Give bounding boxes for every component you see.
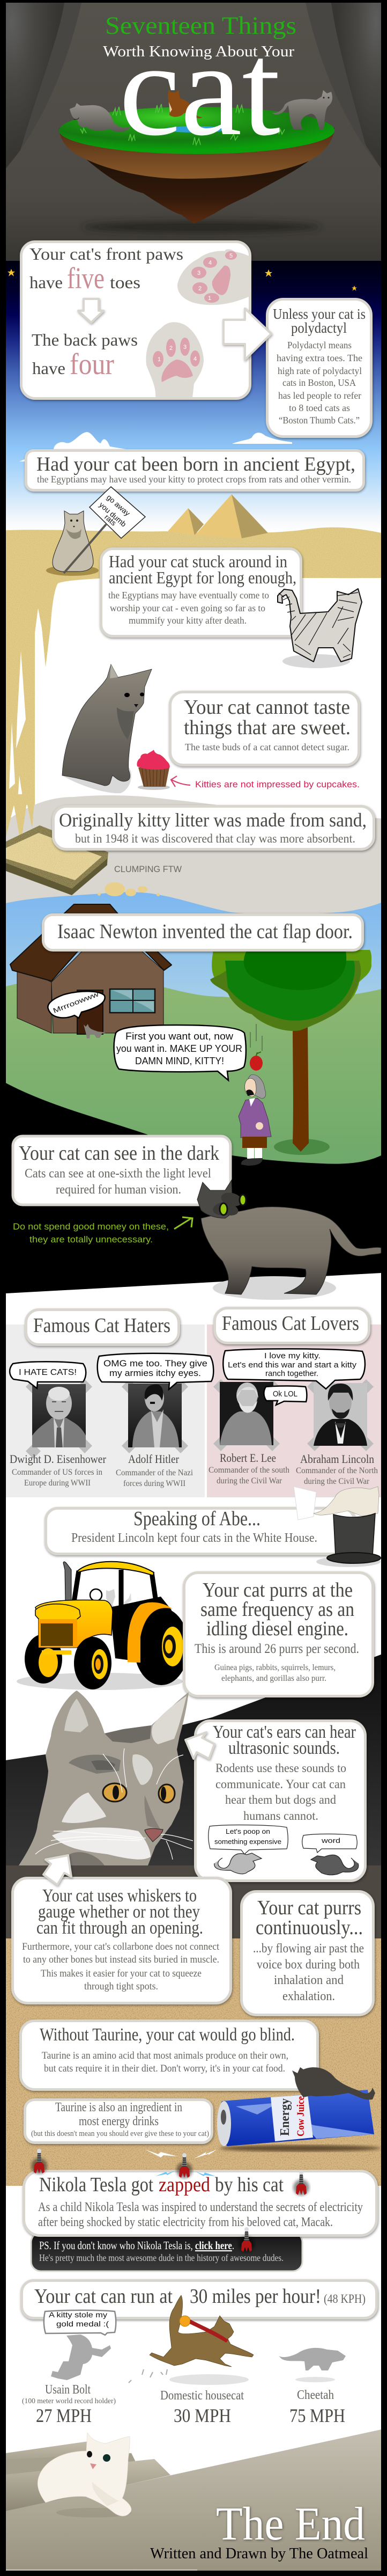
heading: ears bbox=[213, 1722, 356, 1758]
arrow: to ears bbox=[185, 1732, 214, 1759]
heading: whiskers: can fit through an opening. bbox=[36, 1918, 203, 1938]
background: cork bbox=[6, 1938, 381, 2186]
speech: let's end this war: Let's end this war and start a kitty bbox=[228, 1360, 357, 1370]
portrait: lincoln bbox=[314, 1383, 367, 1446]
heading: mummify: Had your cat stuck around in bbox=[109, 552, 287, 571]
illustration: cat with night vision goggles bbox=[197, 1180, 381, 1300]
text: purr rate: This is around 26 purrs per second. bbox=[195, 1642, 359, 1656]
illustration: cat with sign bbox=[46, 487, 145, 576]
text: ears: communicate. Your cat can bbox=[215, 1777, 346, 1791]
speech: ok lol bbox=[264, 1386, 307, 1405]
canopy bbox=[210, 950, 371, 1031]
door bbox=[77, 990, 103, 1034]
icon: front paw: 1 bbox=[208, 295, 211, 302]
sand drip tails bbox=[6, 794, 35, 844]
portrait: hitler bbox=[128, 1384, 182, 1447]
icon: front paw: 2 bbox=[198, 286, 202, 292]
far wheel bbox=[25, 1634, 62, 1684]
caption: lincoln: Abraham Lincoln bbox=[300, 1452, 374, 1466]
heading: purr: Your cat purrs at the bbox=[203, 1579, 353, 1601]
text: whiskers: Furthermore, your cat's collarbone does not connect bbox=[22, 1941, 220, 1952]
the end: The End bbox=[216, 2498, 365, 2550]
illustration: litter box bbox=[6, 825, 182, 896]
heading: tesla: Nikola Tesla got bbox=[39, 2174, 153, 2196]
litter clumps bbox=[98, 882, 160, 896]
text: whiskers: to any other bones but instead sits buried in muscle. bbox=[23, 1954, 219, 1965]
text: have five toes: toes bbox=[110, 273, 140, 292]
text: purr continuously: inhalation and bbox=[274, 1973, 344, 1987]
desert bbox=[6, 528, 381, 805]
speech: mouse two: word bbox=[321, 1836, 340, 1845]
header: stage bbox=[6, 3, 381, 261]
arrow: down bbox=[78, 299, 103, 323]
caption: usain bolt: Usain Bolt bbox=[45, 2383, 91, 2397]
heading: taste: Your cat cannot taste bbox=[184, 696, 350, 719]
caption: cheetah: 75 MPH bbox=[289, 2405, 345, 2426]
heading: tesla: zapped bbox=[159, 2174, 210, 2196]
arrow: right bbox=[224, 309, 271, 360]
heading: dark: Your cat can see in the dark bbox=[19, 1142, 219, 1165]
icon: front paw: 3 bbox=[197, 270, 200, 276]
heading: whiskers bbox=[36, 1886, 203, 1938]
text: ears bbox=[215, 1761, 346, 1823]
caption: lincoln: during the Civil War bbox=[304, 1477, 370, 1486]
right grey cat bbox=[272, 90, 332, 129]
speech text bbox=[116, 1031, 242, 1066]
text: mummify: the Egyptians may have eventually come to bbox=[108, 590, 269, 601]
caption: cheetah bbox=[289, 2388, 345, 2426]
text: energy warning: (but this doesn't mean you should ever give these to your cat) bbox=[31, 2129, 209, 2138]
note: night vision goggles bbox=[13, 1217, 192, 1245]
panel: famous cat haters bbox=[26, 1309, 179, 1345]
panel: paws bbox=[21, 241, 250, 398]
caption: housecat: Domestic housecat bbox=[160, 2389, 244, 2403]
cab frame bbox=[74, 1570, 156, 1610]
text: polydactyl explanation: having extra toes. The bbox=[277, 353, 362, 363]
text: polydactyl explanation: to 8 toed cats as bbox=[289, 402, 350, 413]
heading: purr bbox=[200, 1579, 354, 1640]
background: wall bbox=[6, 1865, 381, 1938]
text: other purring animals: elephants, and gorillas also purr. bbox=[221, 1674, 326, 1683]
text: polydactyl explanation: high rate of polydactyl bbox=[278, 365, 362, 376]
caption: usain bolt bbox=[22, 2383, 116, 2426]
background: white lower section bbox=[6, 2186, 381, 2571]
text: have four bbox=[32, 348, 114, 381]
can label: Energy bbox=[278, 2098, 292, 2136]
panel: taste bbox=[170, 692, 359, 765]
heading: taste: things that are sweet. bbox=[184, 716, 351, 739]
icon: back paw: 3 bbox=[183, 344, 187, 350]
speech text: DAMN MIND, KITTY! bbox=[135, 1056, 224, 1066]
heading: purr: same frequency as an bbox=[200, 1598, 354, 1621]
whiskers bbox=[35, 1748, 193, 1860]
caption: hitler: Commander of the Nazi bbox=[116, 1468, 194, 1477]
caption: lee bbox=[209, 1451, 289, 1485]
heading: egypt: Had your cat been born in ancient Egypt, bbox=[36, 453, 355, 475]
text: have five toes bbox=[29, 262, 140, 295]
apple bbox=[250, 1024, 263, 1071]
heading: mummify: ancient Egypt for long enough, bbox=[109, 568, 296, 587]
heading: abe: Speaking of Abe... bbox=[133, 1507, 261, 1530]
heading: litter: Originally kitty litter was made from sand, bbox=[59, 809, 367, 831]
text: mummify: mummify your kitty after death. bbox=[129, 615, 247, 626]
heading: run: Your cat can run at bbox=[34, 2285, 173, 2308]
text: whiskers: This makes it easier for your cat to squeeze bbox=[41, 1968, 202, 1979]
floating island bbox=[59, 104, 334, 224]
heading: energy drinks bbox=[55, 2101, 182, 2128]
panel: ps box bbox=[31, 2233, 302, 2271]
speech: omg me too: my armies itchy eyes. bbox=[109, 1368, 201, 1378]
pyramids bbox=[168, 494, 268, 538]
sign text: you dumb bbox=[98, 500, 128, 529]
text: dark bbox=[25, 1167, 211, 1197]
text: taste: The taste buds of a cat cannot detect sugar. bbox=[185, 742, 349, 752]
text: mummify: worship your cat - even going so far as to bbox=[110, 603, 265, 613]
text: ears: Rodents use these sounds to bbox=[215, 1761, 346, 1775]
text: polydactyl explanation: “Boston Thumb Cats.” bbox=[279, 415, 360, 426]
speech: mouse one: Let's poop on bbox=[226, 1827, 270, 1835]
text: purr continuously: ...by flowing air past the bbox=[253, 1942, 364, 1956]
stars bbox=[8, 269, 357, 291]
heading: tesla: by his cat bbox=[215, 2174, 284, 2196]
cupcake bbox=[137, 750, 170, 790]
panel: run speed bbox=[21, 2281, 376, 2318]
nose bbox=[145, 1828, 163, 1842]
speech: mouse two bbox=[302, 1834, 357, 1853]
illustration: grey cat with cupcake bbox=[62, 664, 360, 793]
caption: lincoln: Commander of the North bbox=[296, 1466, 378, 1475]
icon: back paw: 4 bbox=[194, 356, 197, 362]
panel: purr frequency bbox=[184, 1572, 373, 1696]
text: purr continuously: voice box during both bbox=[257, 1958, 360, 1972]
text: have four: four bbox=[70, 348, 114, 381]
sand drips cut-outs bbox=[9, 651, 26, 810]
caption: usain bolt: 27 MPH bbox=[36, 2405, 92, 2426]
text: dark: required for human vision. bbox=[56, 1183, 181, 1197]
heading: ears: Your cat's ears can hear bbox=[213, 1722, 356, 1742]
heading: whiskers: Your cat uses whiskers to bbox=[42, 1886, 197, 1906]
text: egypt: the Egyptians may have used your kitty to protect crops from rats and other vermin. bbox=[37, 474, 351, 485]
text: other purring animals: Guinea pigs, rabbits, squirrels, lemurs, bbox=[214, 1663, 336, 1672]
text: taurine bbox=[42, 2050, 288, 2074]
trunk bbox=[293, 1022, 309, 1152]
fender bbox=[128, 1602, 173, 1663]
illustration: house bbox=[10, 904, 172, 1038]
speech: newton bbox=[114, 1025, 246, 1080]
icon: back paw: 1 bbox=[158, 356, 161, 363]
brown cat bbox=[168, 89, 203, 118]
caption: lee: Robert E. Lee bbox=[220, 1451, 276, 1465]
tape corners bbox=[26, 1379, 374, 1459]
rear wheel bbox=[134, 1608, 189, 1685]
grille bbox=[39, 1619, 77, 1655]
text: whiskers: through tight spots. bbox=[84, 1981, 158, 1992]
icon: front paw: 4 bbox=[209, 260, 212, 266]
eyes bbox=[103, 1783, 175, 1803]
text: kph: (48 KPH) bbox=[324, 2292, 366, 2306]
background: dark band bbox=[6, 1655, 381, 1865]
text: ps detail: He's pretty much the most awesome dude in the history of awesome dudes. bbox=[39, 2252, 284, 2263]
text: ears: humans cannot. bbox=[243, 1809, 318, 1823]
panel: purr continuously bbox=[241, 1891, 373, 2015]
speech: mrrroowww bbox=[48, 990, 105, 1018]
sign text: go away bbox=[105, 493, 132, 517]
panel: speaking of abe bbox=[46, 1507, 354, 1554]
caption: hitler bbox=[116, 1452, 194, 1488]
arrow: pink bbox=[171, 776, 190, 787]
heading: purr continuously: continuously... bbox=[256, 1916, 363, 1939]
illustration: tractor bbox=[17, 1562, 189, 1690]
panel: famous cat haters: Famous Cat Haters bbox=[33, 1314, 170, 1337]
text: ps line: PS. If you don't know who Nikola Tesla is, click here. bbox=[39, 2239, 234, 2252]
caption: eisenhower: Dwight D. Eisenhower bbox=[10, 1452, 107, 1466]
heading: polydactyl: Unless your cat is bbox=[273, 306, 366, 322]
title line 2: Worth Knowing About Your bbox=[103, 43, 294, 60]
speech: mouse one: something expensive bbox=[214, 1838, 281, 1846]
speech: omg me too bbox=[98, 1353, 213, 1389]
label: clumping: CLUMPING FTW bbox=[114, 864, 182, 874]
heading: energy drinks: most energy drinks bbox=[79, 2114, 159, 2128]
panel: energy drinks bbox=[25, 2099, 212, 2142]
cat on can bbox=[292, 2067, 375, 2100]
right curtain bbox=[306, 3, 381, 169]
speech: omg me too: OMG me too. They give bbox=[103, 1358, 207, 1368]
tesla coils bbox=[31, 2149, 309, 2252]
tractor body bbox=[110, 1597, 172, 1664]
text: polydactyl explanation: cats in Boston, USA bbox=[282, 377, 356, 388]
title bbox=[103, 12, 296, 164]
note: night vision goggles: they are totally unnecessary. bbox=[29, 1234, 153, 1245]
panel: famous cat lovers: Famous Cat Lovers bbox=[222, 1312, 359, 1335]
caption: cheetah: Cheetah bbox=[297, 2388, 334, 2402]
speech: i hate cats bbox=[10, 1362, 86, 1388]
text: polydactyl explanation: has led people to refer bbox=[278, 390, 361, 401]
panel: famous cat lovers bbox=[214, 1308, 369, 1343]
heading: run: 30 miles per hour! bbox=[190, 2285, 321, 2308]
footer: stairs bbox=[6, 2429, 381, 2571]
front wheel bbox=[74, 1637, 111, 1689]
heading: tesla bbox=[39, 2174, 284, 2196]
heading: purr: idling diesel engine. bbox=[206, 1618, 348, 1640]
speech: usain bolt: gold medal :( bbox=[56, 2319, 109, 2328]
icon: front paw: 5 bbox=[229, 253, 233, 259]
text: ears: hear them but dogs and bbox=[225, 1793, 336, 1806]
lightning bolts bbox=[145, 2149, 217, 2176]
caption: lee: during the Civil War bbox=[217, 1476, 282, 1485]
caption: hitler: Adolf Hitler bbox=[128, 1452, 180, 1466]
note: cupcakes: Kitties are not impressed by cupcakes. bbox=[195, 779, 360, 789]
driver cat bbox=[90, 1589, 131, 1610]
heading: purr continuously bbox=[256, 1897, 363, 1939]
speech: mrrroowww: Mrrroowww bbox=[52, 990, 100, 1015]
arrow: to whiskers bbox=[43, 1855, 71, 1885]
text: whiskers bbox=[22, 1941, 220, 1992]
heading: back paws: The back paws bbox=[32, 330, 138, 349]
text: mummify bbox=[108, 590, 269, 626]
illustration: mummy cat bbox=[278, 589, 362, 668]
column: haters bbox=[6, 1324, 205, 1497]
panel: ultrasonic bbox=[195, 1721, 366, 1880]
caption: hitler: forces during WWII bbox=[123, 1479, 185, 1488]
heading: whiskers: gauge whether or not they bbox=[38, 1902, 200, 1922]
caption: eisenhower: Europe during WWII bbox=[24, 1479, 91, 1488]
heading: newton: Isaac Newton invented the cat flap door. bbox=[57, 920, 353, 943]
illustration: cat in top hat bbox=[294, 1487, 381, 1567]
caption: eisenhower: Commander of US forces in bbox=[12, 1468, 102, 1477]
panel: see in the dark bbox=[13, 1136, 230, 1205]
panel: whiskers bbox=[13, 1878, 230, 2003]
heading: polydactyl bbox=[273, 306, 366, 336]
icon: light mouse bbox=[214, 1853, 262, 1874]
panel: isaac newton bbox=[43, 914, 362, 950]
exhaust bbox=[63, 1562, 71, 1602]
illustration: apple tree bbox=[210, 950, 371, 1155]
icon: dark mouse bbox=[311, 1855, 359, 1875]
speech: i hate cats: I HATE CATS! bbox=[19, 1368, 77, 1377]
caption: housecat bbox=[160, 2389, 244, 2426]
sign text: rats bbox=[103, 513, 118, 528]
panel: mummify bbox=[101, 548, 301, 636]
left grey cat bbox=[70, 103, 131, 132]
speech: let's end this war: ranch together. bbox=[265, 1369, 318, 1378]
caption: housecat: 30 MPH bbox=[174, 2405, 231, 2426]
speech: ok lol: Ok LOL bbox=[273, 1389, 297, 1399]
caption: lee: Commander of the south bbox=[209, 1466, 289, 1475]
clay hill bbox=[6, 795, 381, 914]
speech: let's end this war: I love my kitty. bbox=[264, 1351, 321, 1360]
text: polydactyl explanation bbox=[277, 340, 362, 426]
heading: polydactyl: polydactyl bbox=[291, 320, 347, 336]
illustration: white cat bbox=[38, 2433, 131, 2518]
illustration: isaac newton bbox=[239, 1075, 271, 1166]
panel: taurine bbox=[20, 2021, 317, 2090]
text: polydactyl explanation: Polydactyl means bbox=[287, 340, 352, 350]
speech text: you want in. MAKE UP YOUR bbox=[116, 1043, 242, 1054]
can label: Cow Juice bbox=[295, 2096, 307, 2136]
icon: back paw: 2 bbox=[169, 345, 173, 352]
text: dark: Cats can see at one-sixth the light level bbox=[25, 1167, 211, 1181]
heading: front paws: Your cat's front paws bbox=[29, 244, 183, 264]
speech text: First you want out, now bbox=[125, 1031, 234, 1042]
background: night to day sky bbox=[6, 261, 381, 905]
text: have four: have bbox=[32, 358, 65, 378]
panel: ancient egypt bbox=[26, 451, 363, 491]
island shadow bbox=[83, 221, 321, 233]
heading: ears: ultrasonic sounds. bbox=[228, 1738, 340, 1758]
text: other purring animals bbox=[214, 1663, 336, 1683]
note: night vision goggles: Do not spend good money on these, bbox=[13, 1221, 169, 1232]
illustration: energy can bbox=[217, 2067, 381, 2151]
heading: mummify bbox=[109, 552, 296, 587]
text: purr continuously: exhalation. bbox=[282, 1989, 335, 2003]
text: tesla: after being shocked by static electricity from his beloved cat, Macak. bbox=[38, 2215, 333, 2229]
title word: cat: cat bbox=[119, 15, 280, 164]
left curtain bbox=[6, 3, 81, 169]
stage backdrop bbox=[6, 3, 381, 261]
caption: usain bolt: (100 meter world record holder) bbox=[22, 2397, 116, 2405]
title line 1: Seventeen Things bbox=[105, 12, 296, 40]
panel: polydactyl bbox=[267, 299, 371, 437]
illustration: running cat with medal bbox=[129, 2295, 254, 2385]
panel: kitty litter bbox=[54, 806, 374, 849]
text: tesla bbox=[38, 2200, 363, 2229]
sky and hills: newton scene bbox=[6, 885, 381, 1164]
caption: lincoln bbox=[296, 1452, 378, 1486]
text: have five toes: have bbox=[29, 273, 63, 292]
text: taurine: Taurine is an amino acid that most animals produce on their own, bbox=[42, 2050, 288, 2061]
cab roof bbox=[78, 1562, 154, 1576]
caption: eisenhower bbox=[10, 1452, 107, 1488]
panel: tesla bbox=[24, 2171, 376, 2236]
icon: back paw bbox=[146, 322, 204, 398]
window bbox=[110, 989, 155, 1013]
speech: mouse one bbox=[209, 1825, 288, 1854]
heading: run bbox=[34, 2285, 321, 2308]
background: white section bbox=[6, 1273, 381, 1760]
small grey cat bbox=[84, 1024, 106, 1038]
text: litter: but in 1948 it was discovered that clay was more absorbent. bbox=[75, 832, 355, 845]
can label bbox=[271, 2095, 313, 2141]
hood bbox=[35, 1600, 113, 1648]
silhouette: cheetah bbox=[279, 2348, 346, 2382]
arrow: green bbox=[174, 1217, 192, 1229]
clouds bbox=[19, 432, 292, 462]
heading: energy drinks: Taurine is also an ingredient in bbox=[55, 2101, 182, 2114]
icon: front paw bbox=[177, 249, 250, 305]
text: abe: President Lincoln kept four cats in the White House. bbox=[71, 1531, 317, 1545]
heading: purr continuously: Your cat purrs bbox=[257, 1897, 361, 1919]
text: purr continuously bbox=[253, 1942, 364, 2003]
heading: taste bbox=[184, 696, 351, 739]
closing title bbox=[150, 2498, 368, 2562]
portrait: eisenhower bbox=[32, 1384, 86, 1447]
speech: let's end this war bbox=[223, 1349, 365, 1389]
column: lovers bbox=[207, 1324, 381, 1497]
speech: usain bolt: A kitty stole my bbox=[49, 2310, 107, 2319]
panel group: haters and lovers bbox=[6, 1308, 381, 1497]
portrait: lee bbox=[220, 1382, 273, 1445]
byline: Written and Drawn by The Oatmeal bbox=[150, 2545, 368, 2562]
illustration: big cat face bbox=[19, 1690, 193, 1865]
speech: usain bolt bbox=[44, 2310, 116, 2335]
silhouette: usain bolt bbox=[51, 2334, 111, 2380]
text: have five toes: five bbox=[67, 262, 105, 295]
text: taurine: but cats require it in their diet. Don't worry, it's in your cat food. bbox=[44, 2063, 285, 2074]
heading: taurine: Without Taurine, your cat would go blind. bbox=[40, 2025, 295, 2045]
